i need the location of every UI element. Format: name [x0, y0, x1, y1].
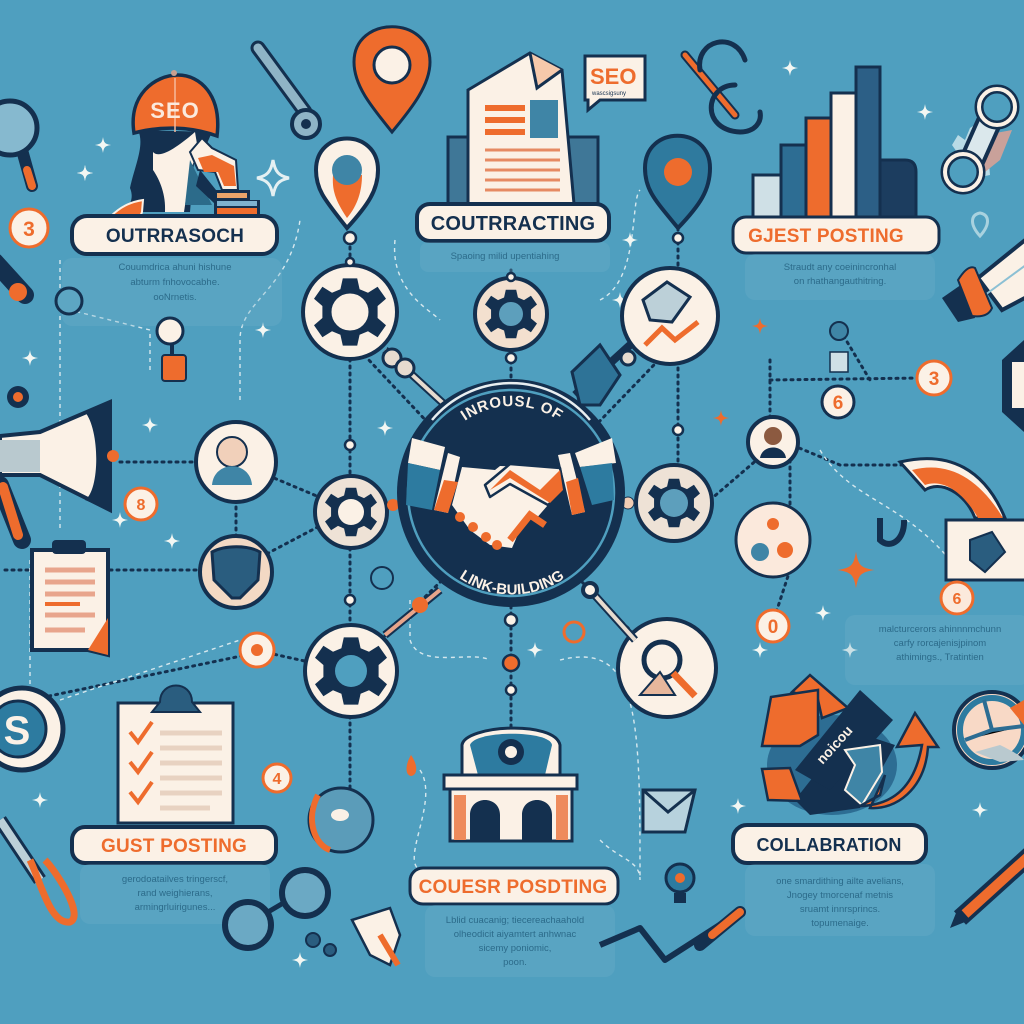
text block: bottom center: olheodicit aiyamtert anhwnac — [454, 929, 577, 940]
icon: number 6 badge — [822, 386, 854, 418]
icon: number 6 badge lower — [941, 582, 973, 614]
icon: top right wrench key — [945, 89, 1015, 190]
text block: guest posting bottom: armingrluirigunes... — [135, 902, 215, 913]
icon: megaphone — [0, 402, 119, 540]
text block: collaboration: sruamt innrsprincs. — [800, 904, 880, 915]
node: magnifier bottom right — [618, 619, 716, 717]
heading: guest posting top — [733, 217, 939, 253]
bar chart — [753, 67, 916, 220]
icon: small lightbulb — [157, 318, 186, 381]
heading: bottom center — [410, 868, 618, 904]
icon: hand — [352, 908, 400, 965]
heading: guest posting bottom — [72, 827, 276, 863]
icon: document — [448, 53, 598, 227]
icon: number 3 badge right: 3 — [929, 369, 939, 390]
icon: number badge 8 — [125, 488, 157, 520]
heading: contracting — [417, 204, 609, 241]
text block: collaboration: Jnogey tmorcenaf metnis — [787, 890, 893, 901]
icon: pen right — [950, 855, 1024, 928]
text block: collaboration: one smardithing ailte avelians, — [776, 876, 904, 887]
node: gear left middle — [315, 476, 387, 548]
text block: right middle: carfy rorcajenisjpinom — [894, 638, 986, 649]
panel: contracting — [417, 53, 610, 272]
icon: number 0 badge — [757, 610, 789, 642]
panel: bottom center posting — [410, 728, 618, 977]
text block: guest posting bottom: gerodoatailves tringerscf, — [122, 874, 228, 885]
icon: lens circle — [309, 788, 373, 852]
text block: right middle: athimings., Tratintien — [896, 652, 984, 663]
heading: guest posting bottom: GUST POSTING — [101, 836, 247, 857]
icon: number 3 badge right — [917, 361, 951, 395]
icon: antenna node — [830, 322, 848, 372]
icon: number 3 badge left: 3 — [23, 218, 35, 241]
panel: collaboration — [733, 675, 938, 936]
connector network — [5, 190, 950, 880]
icon: bolt node left — [7, 386, 29, 408]
icon: small outlined pin — [972, 213, 988, 236]
text block: collaboration — [745, 864, 935, 936]
text block: outreach — [62, 258, 282, 326]
icon: number 3 badge left — [10, 209, 48, 247]
panel: guest posting bottom — [72, 686, 276, 924]
icon: drop — [406, 755, 416, 776]
center spokes — [383, 345, 635, 640]
icon: number 6 badge lower: 6 — [953, 591, 962, 608]
icon: curved arrow — [900, 459, 1005, 518]
icon: bottom lightbulb — [666, 864, 694, 903]
icon: person with SEO cap — [110, 70, 260, 217]
text block: guest posting bottom — [80, 864, 270, 924]
icon: S circle — [0, 688, 63, 770]
node: dots right — [736, 503, 810, 577]
icon: pliers — [0, 820, 74, 922]
icon: small u connector — [880, 518, 904, 544]
icon: plug left — [0, 262, 27, 301]
icon: SEO speech bubble: wascsigsuny — [591, 91, 626, 97]
text block: bottom center — [425, 905, 615, 977]
left sleeve — [406, 438, 460, 513]
text block: guest posting bottom: rand weighierans, — [138, 888, 212, 899]
icon: flashlight right — [942, 228, 1024, 322]
icon: outlined badge — [371, 567, 393, 589]
heading: outreach: OUTRRASOCH — [106, 226, 244, 247]
text block: outreach: Couumdrica ahuni hishune — [118, 262, 232, 273]
icon: SEO speech bubble — [585, 56, 645, 110]
text block: guest posting top: Straudt any coeinincronhal — [784, 262, 896, 273]
small numeral: center lower — [564, 622, 584, 642]
central badge: link-building handshake: INROUSL OF — [460, 396, 564, 420]
icon: number 0 badge: 0 — [768, 617, 778, 638]
heading: guest posting top: GJEST POSTING — [748, 226, 904, 247]
icon: checklist clipboard — [118, 686, 233, 823]
icon: envelope — [643, 790, 695, 832]
icon: target badge — [240, 633, 274, 667]
node: gear top left — [303, 265, 397, 359]
text block: bottom center: sicemy poniomic, — [479, 943, 551, 954]
icon: check swoosh with marker — [600, 912, 740, 960]
text block: guest posting top: on rhathangauthitring. — [794, 276, 886, 287]
text block: outreach: abturm fnhovocabhe. — [130, 277, 220, 288]
icon: collaboration arrows — [762, 675, 938, 815]
icon: number 4 badge — [263, 764, 291, 792]
text block: guest posting top — [745, 254, 935, 300]
heading: collaboration — [733, 825, 926, 863]
node: gear right middle — [636, 465, 712, 541]
text block: contracting — [420, 242, 610, 272]
icon: clipboard left — [32, 540, 108, 655]
text block: right middle — [845, 615, 1024, 685]
icon: outlined star — [257, 160, 289, 196]
icon: orange star — [838, 552, 874, 588]
icon: connector node left — [56, 288, 82, 314]
icon: magnifier — [0, 101, 37, 186]
node: gear top center — [475, 278, 547, 350]
icon: glasses — [225, 870, 336, 956]
icon: top left map pin — [316, 138, 378, 228]
heading: bottom center: COUESR POSDTING — [419, 877, 607, 898]
icon: SEO speech bubble: SEO — [590, 64, 636, 89]
right sleeve — [558, 438, 616, 515]
icon: paper clip hooks — [685, 42, 760, 132]
text block: bottom center: poon. — [503, 957, 527, 968]
icon: large map pin — [354, 27, 430, 132]
icon: wheel right — [954, 692, 1024, 768]
text block: collaboration: topumenaige. — [811, 918, 869, 929]
icon: number 6 badge: 6 — [833, 393, 843, 414]
icon: collaboration arrows: noicou — [813, 722, 856, 767]
central badge: link-building handshake: LINK-BUILDING — [460, 570, 564, 594]
text block: bottom center: Lblid cuacanig; tiecereachaahold — [446, 915, 584, 926]
node: person right — [748, 417, 798, 467]
icon: box card right — [946, 520, 1024, 580]
handshake — [452, 464, 564, 550]
panel: outreach — [62, 70, 282, 326]
icon: top right map pin — [645, 136, 710, 228]
heading: outreach — [72, 216, 277, 254]
icon: number badge 8: 8 — [137, 497, 146, 514]
icon: right screen — [1002, 340, 1024, 432]
node: shield icon — [200, 536, 272, 608]
central badge: link-building handshake — [397, 379, 625, 607]
chain beads — [344, 232, 683, 695]
text block: outreach: ooNrnetis. — [153, 292, 197, 303]
node: gear bottom left — [305, 625, 397, 717]
text block: right middle: malcturcerors ahinnnmchunn — [879, 624, 1001, 635]
text block: contracting: Spaoing milid upentiahing — [451, 251, 559, 262]
node: person icon — [196, 422, 276, 502]
icon: S circle: S — [4, 709, 30, 753]
heading: collaboration: COLLABRATION — [756, 835, 902, 855]
node: chart top right — [622, 268, 718, 364]
panel: guest posting top — [733, 67, 939, 300]
icon: person with SEO cap: SEO — [150, 98, 200, 123]
heading: contracting: COUTRRACTING — [431, 213, 595, 235]
icon: bank building — [444, 728, 577, 842]
icon: number 4 badge: 4 — [273, 771, 282, 788]
icon: wrench — [258, 48, 320, 138]
